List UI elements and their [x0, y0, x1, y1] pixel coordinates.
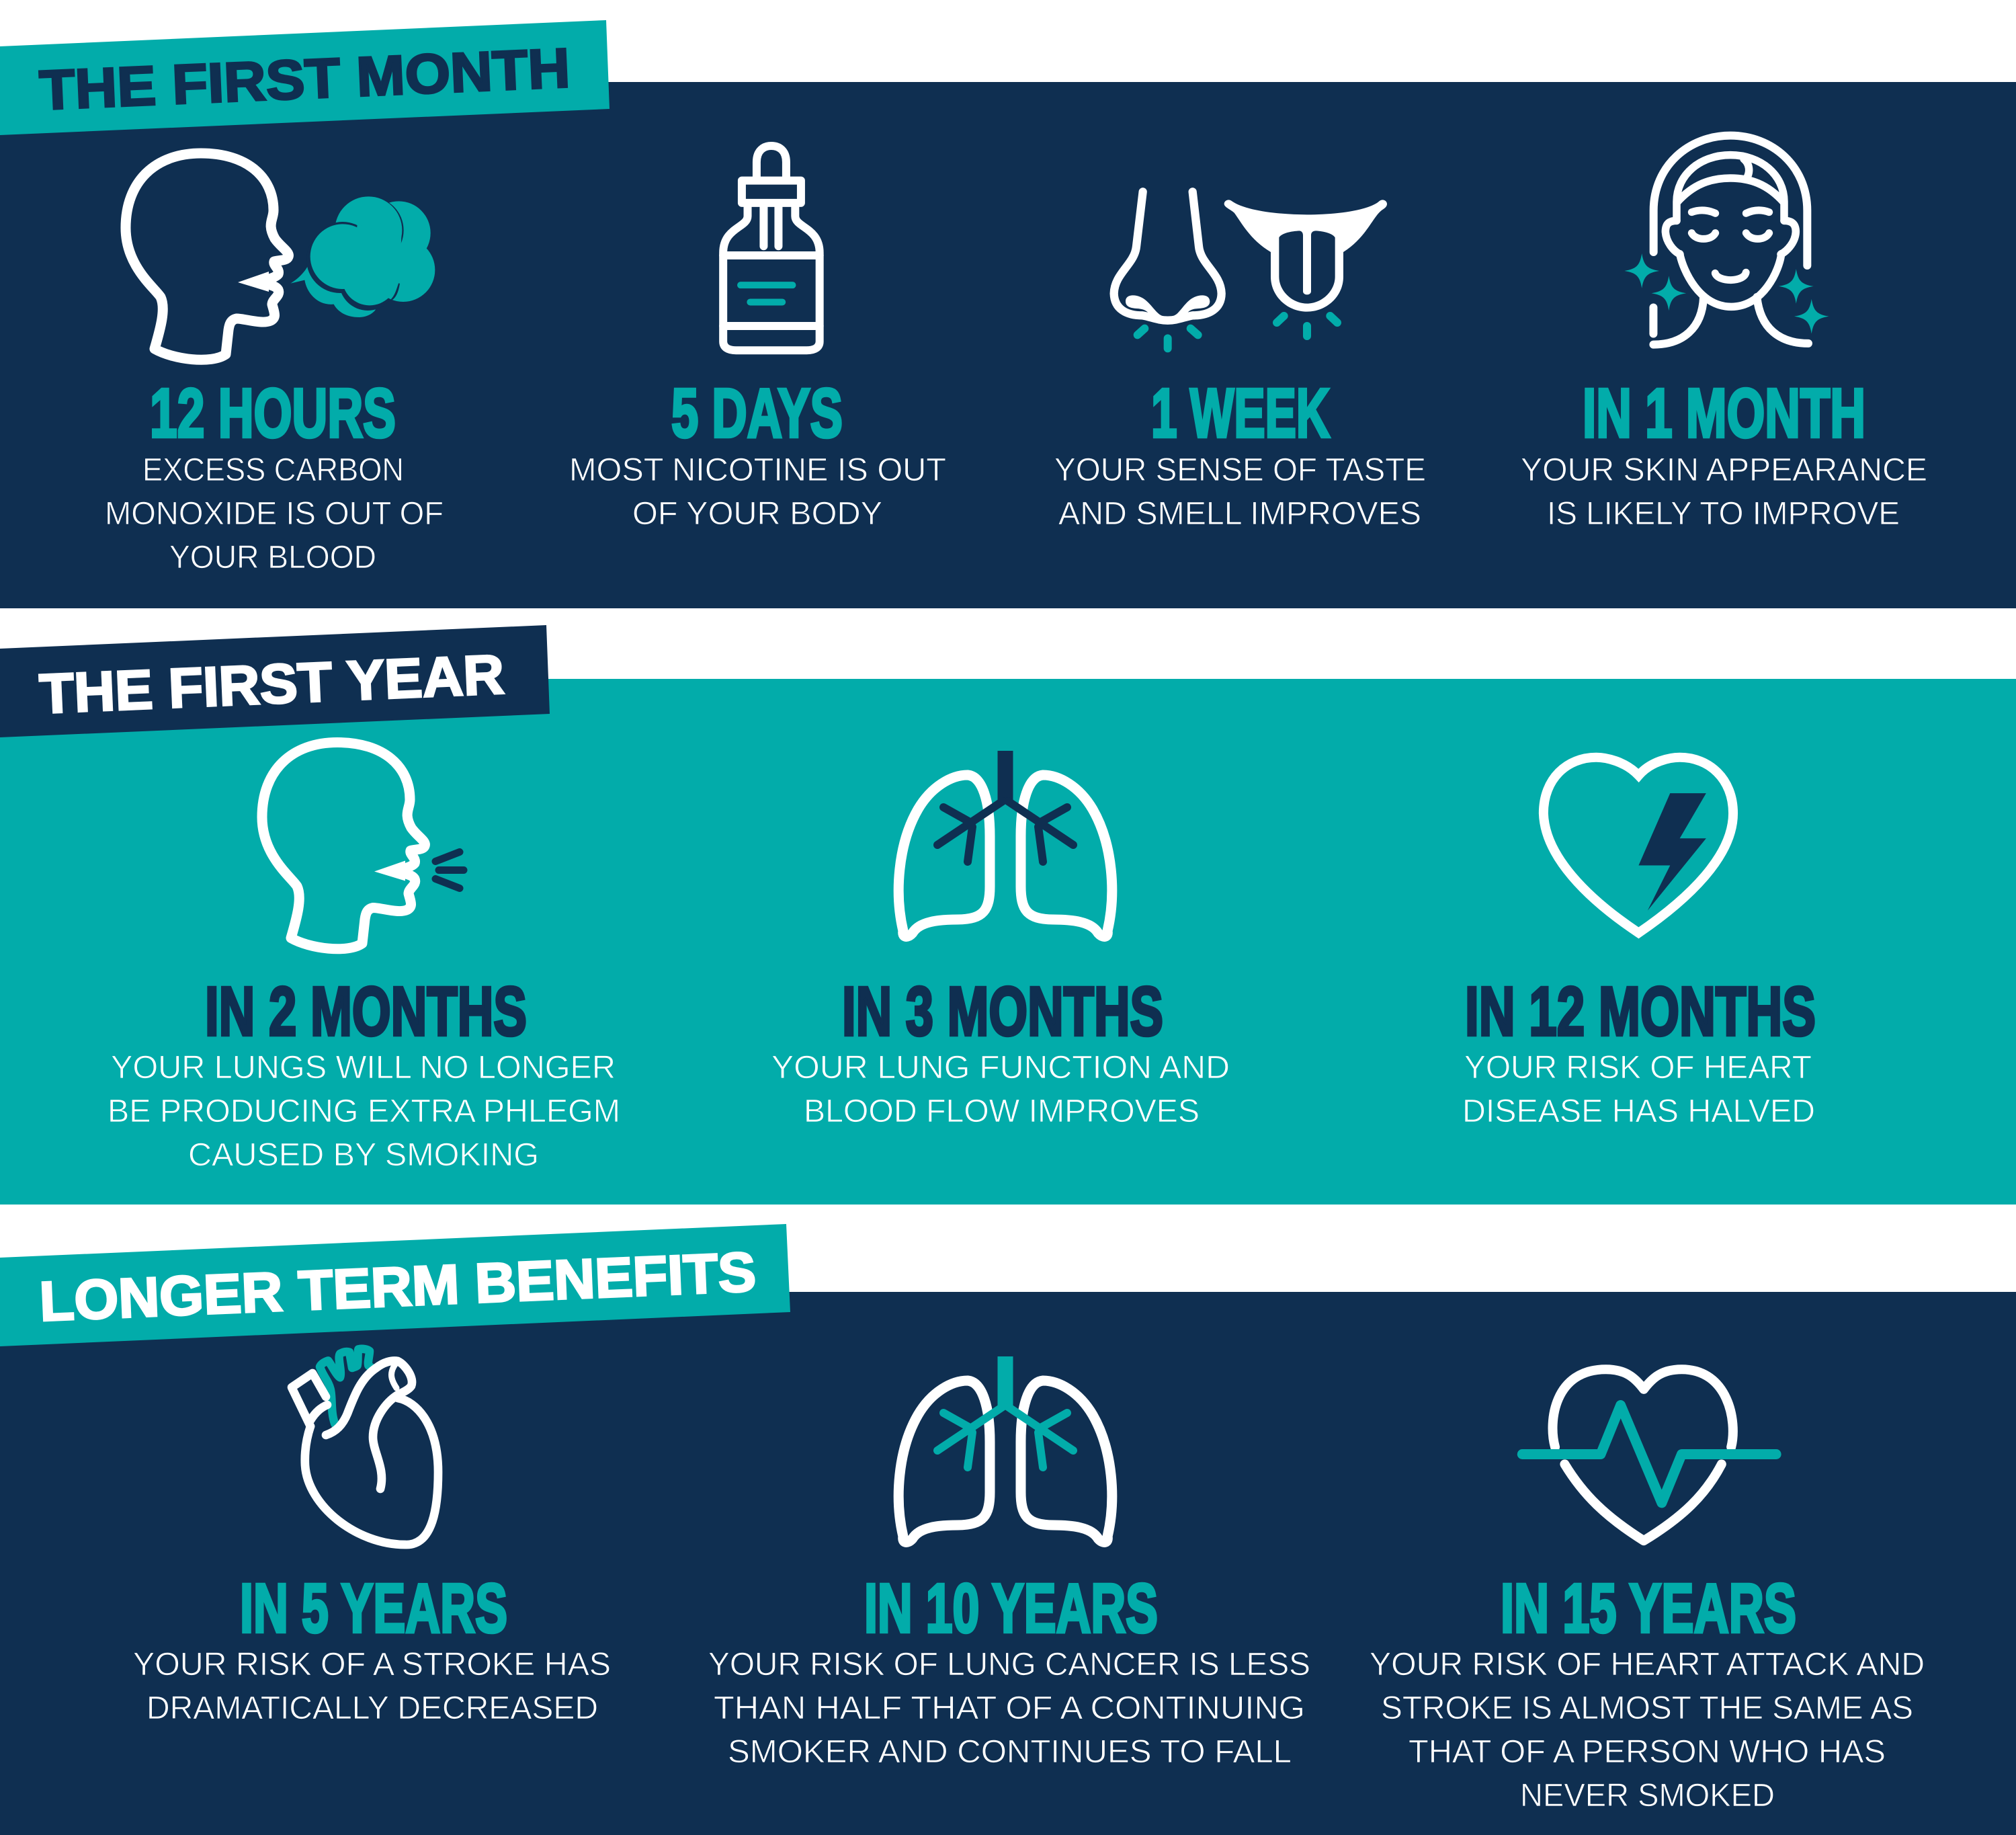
description: taste and smell: AND SMELL IMPROVES	[1058, 496, 1421, 532]
description: carbon monoxide	[105, 452, 444, 575]
item: in 3 months	[771, 751, 1230, 1129]
description: heart disease: YOUR RISK OF HEART	[1464, 1050, 1812, 1086]
icon: heart with lightning bolt	[1544, 758, 1733, 933]
description: heart attack: STROKE IS ALMOST THE SAME AS	[1381, 1690, 1913, 1726]
item: in 15 years	[1370, 1369, 1925, 1813]
banner: the first month	[0, 20, 610, 135]
panel: longer term benefits	[0, 1224, 2016, 1835]
heading: the first month: THE FIRST MONTH	[38, 36, 571, 122]
time label: in 2 months: IN 2 MONTHS	[205, 973, 527, 1050]
icon: lungs navy bronchi	[898, 751, 1112, 936]
description: taste and smell: YOUR SENSE OF TASTE	[1054, 452, 1426, 488]
description: lung cancer: YOUR RISK OF LUNG CANCER IS LESS	[708, 1647, 1310, 1682]
icon: anatomical heart	[292, 1349, 438, 1545]
banner: the first year	[0, 625, 550, 737]
banner: longer term benefits	[0, 1224, 790, 1346]
description: lung function: YOUR LUNG FUNCTION AND	[771, 1050, 1230, 1086]
description: carbon monoxide: EXCESS CARBON	[142, 452, 404, 488]
description: heart attack: THAT OF A PERSON WHO HAS	[1409, 1734, 1886, 1770]
icon: head breathing out smoke	[126, 153, 435, 360]
description: stroke risk	[133, 1647, 611, 1726]
panel: the first month	[0, 20, 2016, 608]
time label: in 1 month: IN 1 MONTH	[1583, 374, 1865, 452]
description: carbon monoxide: YOUR BLOOD	[169, 540, 376, 575]
icon: woman with glowing skin	[1624, 136, 1829, 345]
item: in 5 years	[133, 1349, 611, 1726]
icon: dropper bottle	[723, 146, 820, 350]
item: in 1 month	[1521, 136, 1927, 532]
description: heart attack: NEVER SMOKED	[1520, 1778, 1775, 1813]
item: in 2 months	[108, 742, 620, 1173]
item: in 10 years	[708, 1356, 1310, 1770]
description: carbon monoxide: MONOXIDE IS OUT OF	[105, 496, 444, 532]
description: phlegm: YOUR LUNGS WILL NO LONGER	[111, 1050, 616, 1086]
description: lung function: BLOOD FLOW IMPROVES	[804, 1094, 1200, 1129]
description: taste and smell	[1054, 452, 1426, 532]
description: stroke risk: DRAMATICALLY DECREASED	[146, 1690, 598, 1726]
description: lung cancer: SMOKER AND CONTINUES TO FALL	[728, 1734, 1292, 1770]
time label: in 12 months: IN 12 MONTHS	[1465, 973, 1816, 1050]
description: lung cancer	[708, 1647, 1310, 1770]
description: heart disease	[1462, 1050, 1815, 1129]
description: phlegm: BE PRODUCING EXTRA PHLEGM	[108, 1094, 620, 1129]
icon: lungs teal bronchi	[898, 1356, 1112, 1542]
description: skin appearance	[1521, 452, 1927, 532]
description: phlegm	[108, 1050, 620, 1173]
description: lung function	[771, 1050, 1230, 1129]
time label: in 15 years: IN 15 YEARS	[1501, 1569, 1796, 1647]
item: in 12 months	[1462, 758, 1816, 1129]
time label: 12 hours: 12 HOURS	[150, 374, 396, 452]
time label: in 3 months: IN 3 MONTHS	[842, 973, 1163, 1050]
time label: in 10 years: IN 10 YEARS	[864, 1569, 1158, 1647]
description: skin appearance: IS LIKELY TO IMPROVE	[1547, 496, 1900, 532]
icon: nose and tongue	[1114, 192, 1387, 348]
time label: 5 days: 5 DAYS	[671, 374, 843, 452]
description: heart disease: DISEASE HAS HALVED	[1462, 1094, 1815, 1129]
icon: heart with pulse line	[1522, 1369, 1776, 1541]
description: nicotine	[569, 452, 946, 532]
description: nicotine: OF YOUR BODY	[632, 496, 882, 532]
heading: longer term benefits: LONGER TERM BENEFITS	[38, 1240, 757, 1333]
description: lung cancer: THAN HALF THAT OF A CONTINUING	[714, 1690, 1305, 1726]
item: 1 week	[1054, 192, 1426, 532]
icon: head breathing clearly	[262, 742, 464, 949]
item: 5 days	[569, 146, 946, 532]
item: 12 hours	[105, 153, 444, 575]
panel: the first year	[0, 625, 2016, 1205]
description: skin appearance: YOUR SKIN APPEARANCE	[1521, 452, 1927, 488]
description: stroke risk: YOUR RISK OF A STROKE HAS	[133, 1647, 611, 1682]
time label: in 5 years: IN 5 YEARS	[240, 1569, 507, 1647]
description: phlegm: CAUSED BY SMOKING	[188, 1137, 539, 1173]
description: nicotine: MOST NICOTINE IS OUT	[569, 452, 946, 488]
heading: the first year: THE FIRST YEAR	[38, 643, 505, 725]
time label: 1 week: 1 WEEK	[1151, 374, 1330, 452]
description: heart attack: YOUR RISK OF HEART ATTACK AND	[1370, 1647, 1925, 1682]
description: heart attack	[1370, 1647, 1925, 1813]
